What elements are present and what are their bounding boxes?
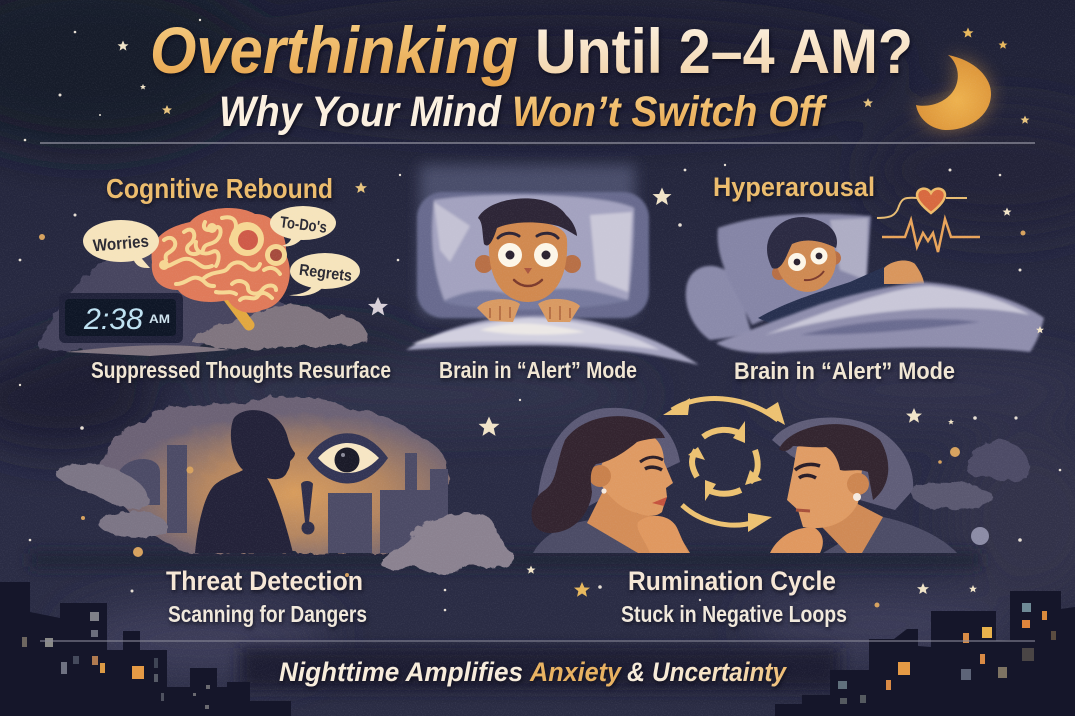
hands [477, 299, 580, 322]
skyline: left [0, 582, 291, 716]
heading: Cognitive Rebound: Cognitive Rebound [106, 173, 333, 204]
backdrop [420, 165, 635, 315]
right side clouds and planet [910, 440, 1030, 545]
caption: Rumination Cycle: Rumination Cycle [628, 566, 836, 596]
bubble: To-Do's: To-Do's [279, 214, 328, 237]
scene: boy awake in bed [406, 165, 699, 383]
title [150, 13, 913, 87]
caption: Brain in "Alert" Mode: Brain in “Alert” Mode [734, 358, 955, 385]
scene: threat detection [55, 397, 516, 627]
subtitle: Won’t Switch Off [512, 88, 827, 136]
bubble: To-Do's [270, 206, 336, 246]
caption: Stuck in Negative Loops: Stuck in Negative Loops [621, 601, 847, 627]
bubble: Worries: Worries [92, 232, 150, 255]
heading: Hyperarousal: Hyperarousal [713, 172, 875, 202]
footer message: Anxiety [529, 657, 623, 687]
arrows: rumination loop [663, 398, 785, 532]
subtitle [219, 88, 827, 136]
scene: hyperarousal [686, 172, 1044, 385]
digital clock: 2:38 [83, 303, 143, 336]
bubble: Regrets: Regrets [298, 262, 353, 285]
woman [532, 408, 690, 553]
digital clock: AM [149, 312, 170, 326]
moon [916, 55, 991, 130]
footer message: & [627, 657, 645, 687]
grey clouds [55, 463, 516, 574]
bubble: Worries [83, 220, 159, 268]
scene: rumination cycle [532, 398, 1030, 627]
bubble: Regrets [289, 253, 360, 296]
footer message: Uncertainty [652, 657, 788, 687]
divider: bottom [40, 640, 1035, 642]
caption: Suppressed Thoughts Resurface: Suppressed Thoughts Resurface [91, 357, 391, 383]
pillow [417, 192, 649, 318]
caption: Threat Detection: Threat Detection [166, 566, 363, 596]
footer message: Nighttime Amplifies [279, 657, 523, 687]
icon: watching eye [307, 433, 388, 484]
title: Overthinking [150, 13, 518, 87]
silhouette person [195, 410, 295, 553]
clouds behind the brain [40, 240, 366, 356]
caption: Scanning for Dangers: Scanning for Dangers [168, 601, 367, 627]
glowing cloud [100, 397, 448, 553]
face [475, 198, 581, 302]
blanket [406, 316, 699, 365]
man [770, 417, 957, 553]
blanket [716, 282, 1044, 353]
pillow and headboard [686, 214, 871, 340]
sleeper [758, 217, 924, 332]
scene: cognitive rebound [40, 173, 391, 383]
digital clock [59, 293, 183, 343]
city buildings [120, 445, 448, 553]
footer message [279, 657, 788, 687]
icon: brain [152, 208, 290, 325]
icon: exclamation mark [301, 481, 314, 534]
skyline: right [775, 591, 1075, 716]
title: Until 2–4 AM? [535, 17, 913, 87]
caption: Brain in "Alert" Mode: Brain in “Alert” Mode [439, 357, 637, 383]
icon: heart with pulse line [877, 189, 980, 252]
divider: top [40, 142, 1035, 144]
subtitle: Why Your Mind [219, 88, 502, 136]
